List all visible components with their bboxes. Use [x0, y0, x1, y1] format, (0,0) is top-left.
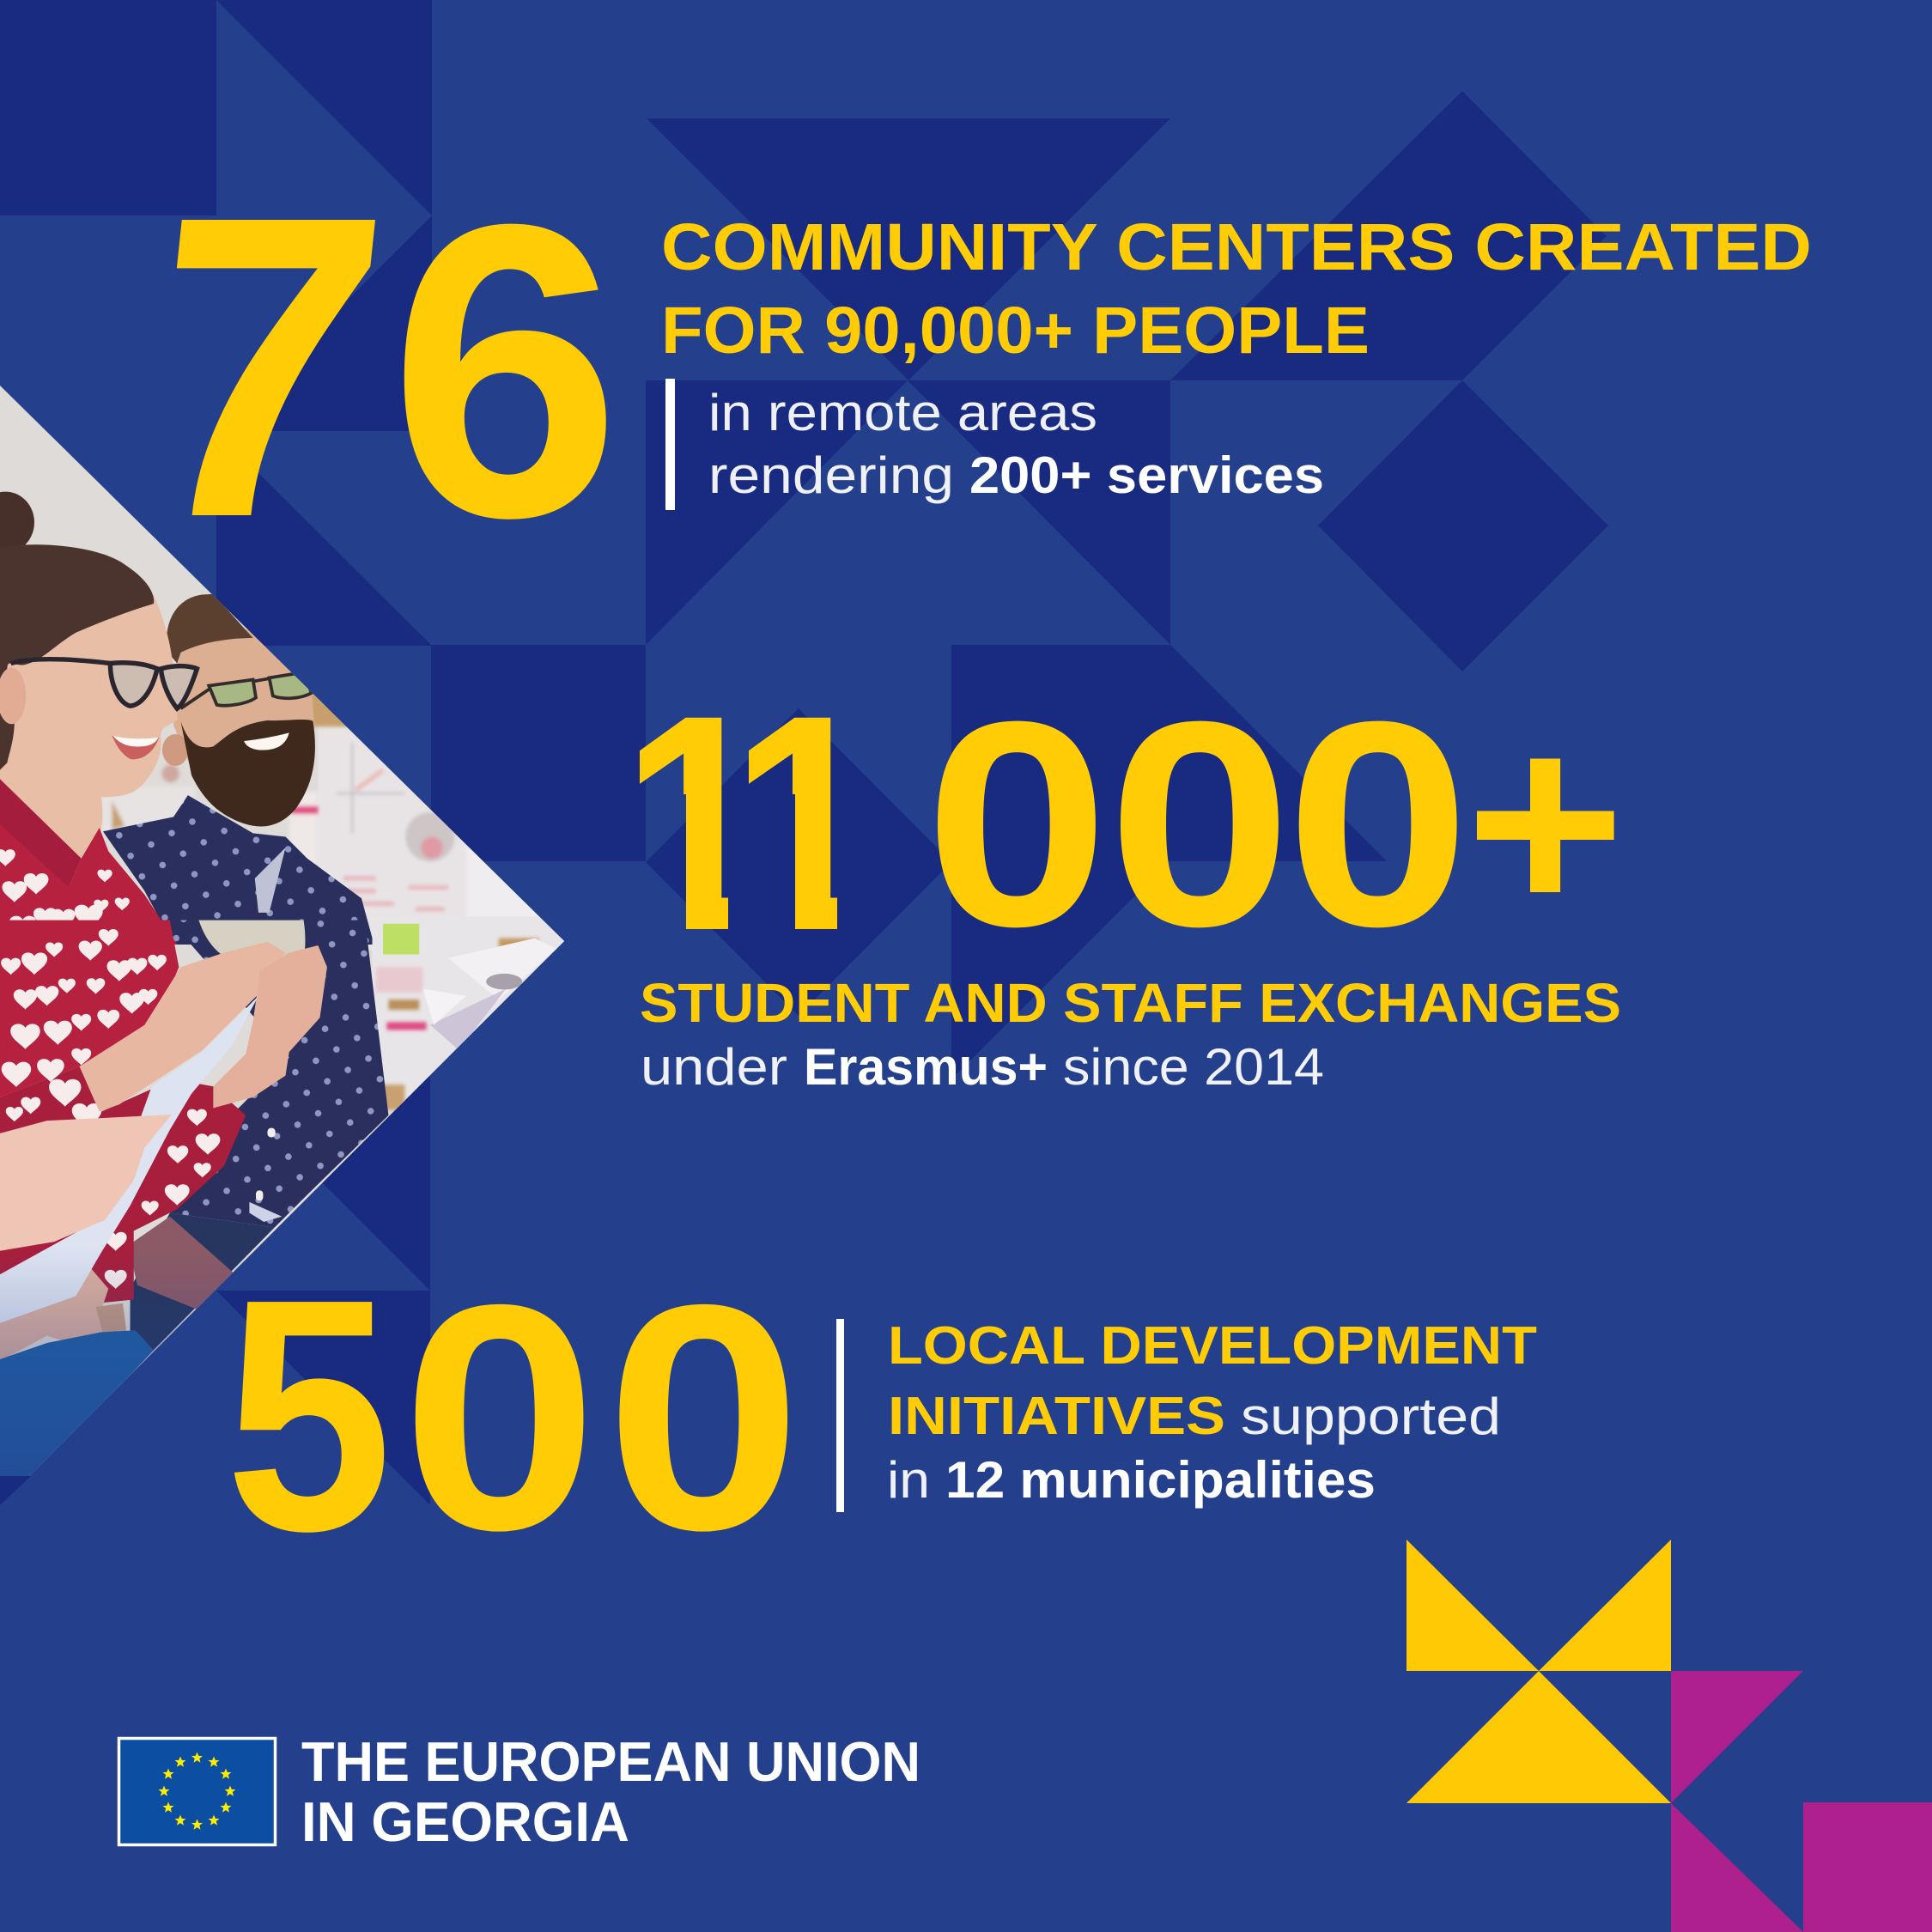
- man: beard: [180, 720, 315, 827]
- woman: shirt lower: [0, 920, 179, 1097]
- man: forearm: [128, 1217, 233, 1312]
- description: Erasmus+: [641, 1038, 1324, 1096]
- man: glasses: [180, 672, 312, 708]
- heading: local development: [888, 1316, 1537, 1446]
- stat: 11 000+: [640, 718, 1619, 1085]
- man: hair: [167, 594, 253, 664]
- heading: community centers: FOR 90,000+ PEOPLE: [661, 294, 1370, 368]
- divider bar: [836, 1319, 844, 1512]
- heading: local development: INITIATIVES: [888, 1387, 1225, 1446]
- left hand: [0, 1115, 172, 1251]
- woman: hair: [0, 544, 154, 770]
- heading: community centers: [661, 210, 1812, 368]
- description: Erasmus+: since 2014: [1063, 1038, 1324, 1096]
- man: shirt lower: [170, 920, 388, 1227]
- decoration: yellow triangles: [1406, 1540, 1671, 1803]
- paper: [0, 996, 258, 1323]
- description: municipalities: in: [887, 1451, 930, 1509]
- woman: glasses: [11, 659, 197, 708]
- mug: [199, 920, 306, 957]
- lower part of the photo: [0, 916, 574, 1479]
- description: municipalities: 12 municipalities: [945, 1451, 1376, 1509]
- woman: ear: [0, 668, 26, 724]
- man: shirt: [103, 795, 374, 945]
- man: face: [173, 629, 314, 765]
- icon: EU flag: [118, 1738, 275, 1844]
- decoration: magenta shapes: [1671, 1671, 1932, 1932]
- woman: bun: [0, 492, 34, 553]
- logo text: The European Union in Georgia: THE EUROPEAN UNION: [301, 1730, 920, 1793]
- description: remote areas: rendering: [708, 447, 954, 504]
- description: municipalities: [887, 1388, 1501, 1509]
- number 76: [124, 127, 621, 607]
- heading: exchanges: STUDENT AND STAFF EXCHANGES: [640, 972, 1621, 1034]
- woman: collar: [0, 779, 82, 887]
- heading: local development: LOCAL DEVELOPMENT: [888, 1316, 1537, 1376]
- woman: shirt: [0, 824, 177, 945]
- stat: 500: [225, 1231, 1537, 1601]
- number 11 000+: [640, 718, 1614, 929]
- photo: two smiling colleagues: [0, 378, 575, 1494]
- geometric background pattern: [0, 0, 1608, 1505]
- logo text: The European Union in Georgia: IN GEORGIA: [301, 1790, 629, 1853]
- description: Erasmus+: Erasmus+: [804, 1038, 1048, 1096]
- woman: face and neck: [0, 595, 178, 866]
- heading: community centers: COMMUNITY CENTERS CREATED: [661, 210, 1812, 284]
- divider bar: [665, 379, 675, 510]
- description: remote areas: [708, 384, 1324, 504]
- man: mouth: [244, 732, 289, 750]
- woman: forearm and hand: [80, 942, 286, 1112]
- number 11 000+: +: [1466, 676, 1625, 969]
- man: hand: [213, 945, 327, 1108]
- number 11 000+: 000: [925, 661, 1470, 987]
- number 76: 6: [389, 137, 621, 604]
- jeans: [0, 1330, 154, 1479]
- number 500: [225, 1231, 802, 1601]
- logo text: The European Union in Georgia: [301, 1730, 920, 1853]
- dark trousers: [131, 1213, 275, 1352]
- number 500: 00: [402, 1238, 802, 1597]
- lower hand and belt: [0, 1263, 126, 1361]
- number 76: 7: [124, 127, 403, 607]
- description: remote areas: 200+ services: [969, 447, 1324, 504]
- description: remote areas: in remote areas: [708, 384, 1097, 441]
- description: Erasmus+: under: [641, 1038, 787, 1096]
- number 11 000+: 11: [619, 652, 882, 995]
- description: municipalities: supported: [1241, 1388, 1501, 1445]
- stat: 76: [124, 127, 1812, 607]
- upper part of the photo: [0, 492, 574, 951]
- woman: mouth: [112, 736, 159, 759]
- number 500: 5: [225, 1231, 392, 1601]
- blue fade over the photo: [0, 1265, 240, 1476]
